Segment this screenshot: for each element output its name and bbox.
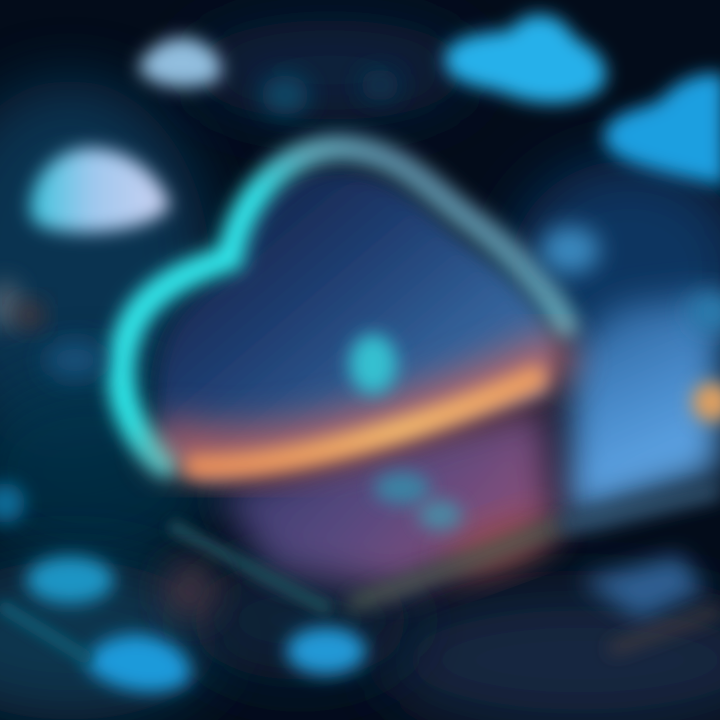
cloud: far right bright	[604, 73, 720, 185]
diagonal strip right	[560, 490, 720, 525]
cloud fill	[158, 170, 555, 480]
cloud: left white	[30, 148, 170, 233]
cloud: bottom center-left	[85, 635, 191, 692]
panel: light blue wall at right	[565, 295, 720, 520]
horizon glow	[175, 360, 550, 452]
cloud: bottom center	[286, 627, 366, 675]
glow: left edge warm spot	[16, 301, 44, 329]
teal blob below band	[374, 472, 430, 504]
cloud: lower purple body	[215, 405, 555, 590]
cloud: small right	[540, 226, 600, 274]
warm reflection bottom	[164, 562, 216, 618]
glow: right edge orange	[692, 382, 720, 422]
cloud: top right bright	[444, 14, 606, 103]
center teal dot	[349, 334, 397, 394]
glow: left blue spot	[45, 340, 105, 380]
orange reflection	[350, 525, 560, 605]
cloud: bottom left	[26, 556, 114, 604]
glow: right edge blue	[688, 292, 720, 332]
warm glow lower right	[441, 506, 559, 584]
reflection panel bottom right	[580, 555, 705, 620]
cloud: top left small	[138, 38, 221, 87]
horizon band	[195, 378, 535, 466]
glow: left edge spot	[0, 281, 21, 329]
teal blob below band, right	[418, 500, 462, 530]
main cloud	[121, 148, 565, 530]
cloud rim outline	[121, 148, 565, 462]
glow: left edge low spot	[0, 483, 25, 523]
diagonal strip lower center	[170, 525, 330, 610]
diagonal teal strip bottom left	[0, 605, 90, 660]
glow: top blue spot right	[360, 69, 400, 101]
warm strip bottom right	[610, 610, 720, 650]
glow: top blue spot	[261, 75, 309, 115]
